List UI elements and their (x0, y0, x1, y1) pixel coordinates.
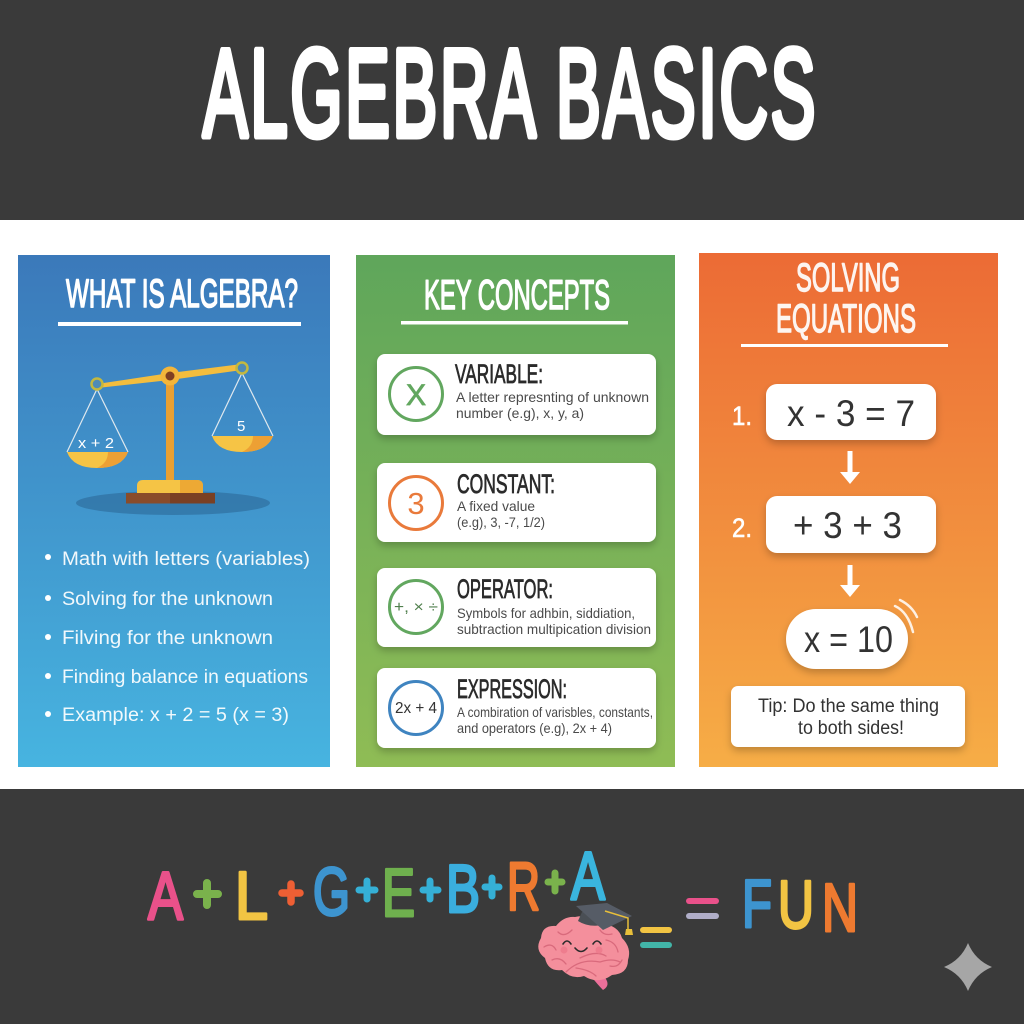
equation: algebra letters: A (571, 838, 605, 914)
panel: what is algebra (18, 255, 330, 767)
heading: solving equations: SOLVING (796, 256, 900, 300)
step 2: 2. (732, 513, 752, 543)
card: constant (377, 463, 656, 542)
heading: key concepts: KEY CONCEPTS (424, 271, 610, 318)
step 2 (732, 496, 936, 553)
equation: algebra letters: G (313, 854, 350, 930)
card: operator (377, 568, 656, 647)
arrow: step 2 to answer (840, 565, 860, 597)
step 1: x - 3 = 7 (787, 393, 915, 434)
heading: what is algebra: WHAT IS ALGEBRA? (66, 272, 298, 316)
card: constant: (e.g), 3, -7, 1/2) (457, 514, 545, 530)
step 1: 1. (732, 401, 752, 431)
arrow: step 1 to 2 (840, 451, 860, 484)
heading: solving equations (776, 256, 916, 341)
bullet list: Filving for the unknown (62, 628, 273, 649)
card: operator: OPERATOR: (457, 574, 553, 604)
scale label: x + 2: x + 2 (78, 435, 114, 452)
word: fun: N (822, 870, 858, 946)
icon: balance scale (67, 362, 273, 515)
word: fun (742, 866, 858, 946)
icon: brain with graduation cap (538, 903, 633, 990)
step 1 (732, 384, 936, 440)
equation: algebra letters: R (507, 849, 540, 925)
card: constant: CONSTANT: (457, 469, 555, 499)
card: variable: number (e.g), x, y, a) (456, 405, 584, 421)
bullet list: Finding balance in equations (62, 667, 308, 688)
word: fun: F (742, 866, 772, 942)
answer pill: x = 10 (804, 619, 893, 660)
card: variable: VARIABLE: (455, 359, 543, 389)
card: constant: A fixed value (457, 498, 535, 514)
card: expression (377, 668, 656, 748)
equation: algebra letters: B (446, 851, 480, 927)
equation: algebra letters (148, 838, 605, 934)
card: operator: subtraction multipication division (457, 621, 651, 637)
panel: key concepts (356, 255, 675, 767)
equals sign: pink and grey (686, 898, 719, 919)
card: variable: A letter represnting of unknown (456, 389, 649, 405)
card: expression: 2x + 4 (395, 700, 437, 717)
tip box: Tip: Do the same thing (758, 696, 939, 717)
card: operator: +, × ÷ (394, 599, 438, 616)
scale label: 5: 5 (237, 418, 245, 435)
tip box (731, 686, 965, 747)
card: expression: EXPRESSION: (457, 674, 567, 704)
card: operator: Symbols for adhbin, siddiation, (457, 605, 635, 621)
icon: sparkle (944, 943, 992, 991)
equation: algebra letters: E (382, 855, 415, 931)
bullet list: Example: x + 2 = 5 (x = 3) (62, 705, 289, 726)
step 2: + 3 + 3 (793, 505, 902, 546)
word: fun: U (778, 867, 814, 943)
card: constant: 3 (407, 486, 425, 521)
panel: solving equations (699, 253, 998, 767)
bullet list: Math with letters (variables) (62, 549, 310, 570)
card: expression: and operators (e.g), 2x + 4) (457, 720, 612, 736)
card: expression: A combiration of varisbles, constants, (457, 704, 653, 720)
answer pill (786, 600, 917, 669)
equation: algebra letters: A (148, 858, 183, 934)
equation: algebra letters: L (235, 858, 268, 934)
card: variable: X (406, 379, 426, 412)
bullet list: Solving for the unknown (62, 589, 273, 610)
bullet list (45, 549, 310, 726)
card: variable (377, 354, 656, 435)
equals sign: yellow and teal (640, 927, 672, 948)
tip box: to both sides! (798, 718, 904, 739)
heading: solving equations: EQUATIONS (776, 297, 916, 341)
